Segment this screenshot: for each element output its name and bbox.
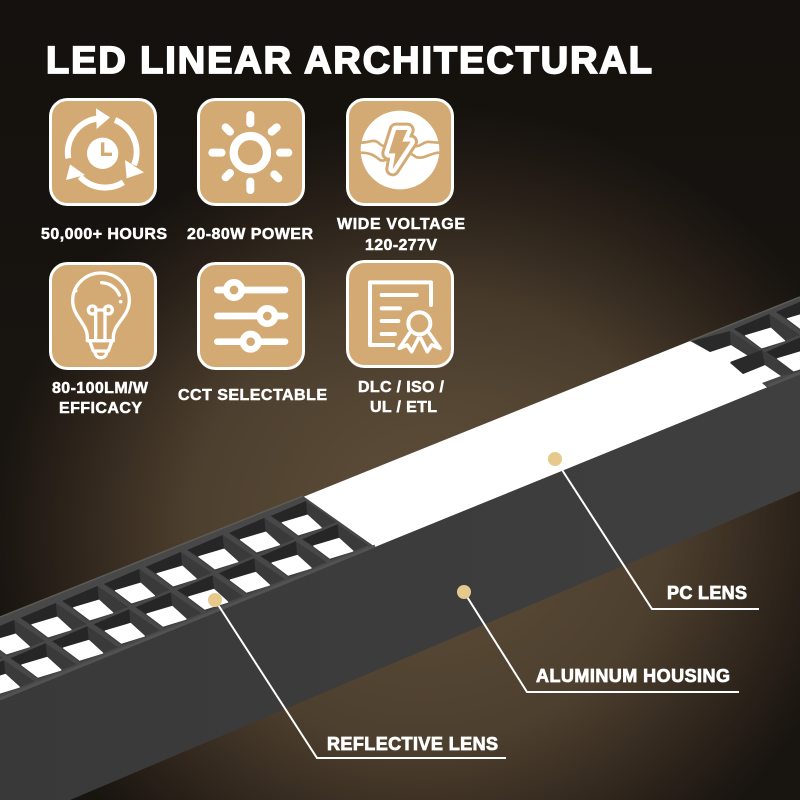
feature: wide voltage (337, 100, 465, 254)
feature: CCT selectable (178, 264, 327, 404)
feature: 50,000+ hours (41, 100, 167, 243)
label: 80-100LM/W (52, 380, 149, 397)
callout: reflective lens (208, 593, 506, 758)
label: UL / ETL (370, 399, 437, 416)
reflective grille: right section (690, 297, 800, 390)
title: LED LINEAR ARCHITECTURAL (46, 40, 652, 82)
aluminum housing (0, 373, 800, 800)
callout: reflective lens: REFLECTIVE LENS (327, 734, 498, 754)
label: CCT SELECTABLE (178, 387, 327, 404)
callout: aluminum housing (457, 585, 739, 692)
light fixture (0, 297, 800, 800)
icon: lifetime clock (50, 100, 156, 204)
icon: light bulb (50, 264, 156, 368)
label (337, 216, 465, 254)
icon: voltage bolt (348, 100, 452, 204)
callout: PC lens (548, 452, 759, 609)
label: WIDE VOLTAGE (337, 216, 465, 233)
label (358, 379, 445, 416)
icon: certificate (348, 262, 452, 366)
icon: sun (198, 100, 304, 204)
label (52, 380, 149, 417)
PC lens (303, 297, 800, 547)
label: 50,000+ HOURS (41, 226, 167, 243)
label: 120-277V (365, 237, 437, 254)
feature: efficacy (50, 264, 156, 417)
feature: 20-80W power (187, 100, 313, 243)
callout: PC lens: PC LENS (667, 583, 747, 603)
icon: sliders (198, 264, 304, 368)
callout: aluminum housing: ALUMINUM HOUSING (536, 666, 730, 686)
label: DLC / ISO / (358, 379, 445, 396)
feature: certifications (348, 262, 452, 416)
label: EFFICACY (59, 400, 142, 417)
label: 20-80W POWER (187, 226, 313, 243)
reflective grille: left section (0, 496, 375, 700)
